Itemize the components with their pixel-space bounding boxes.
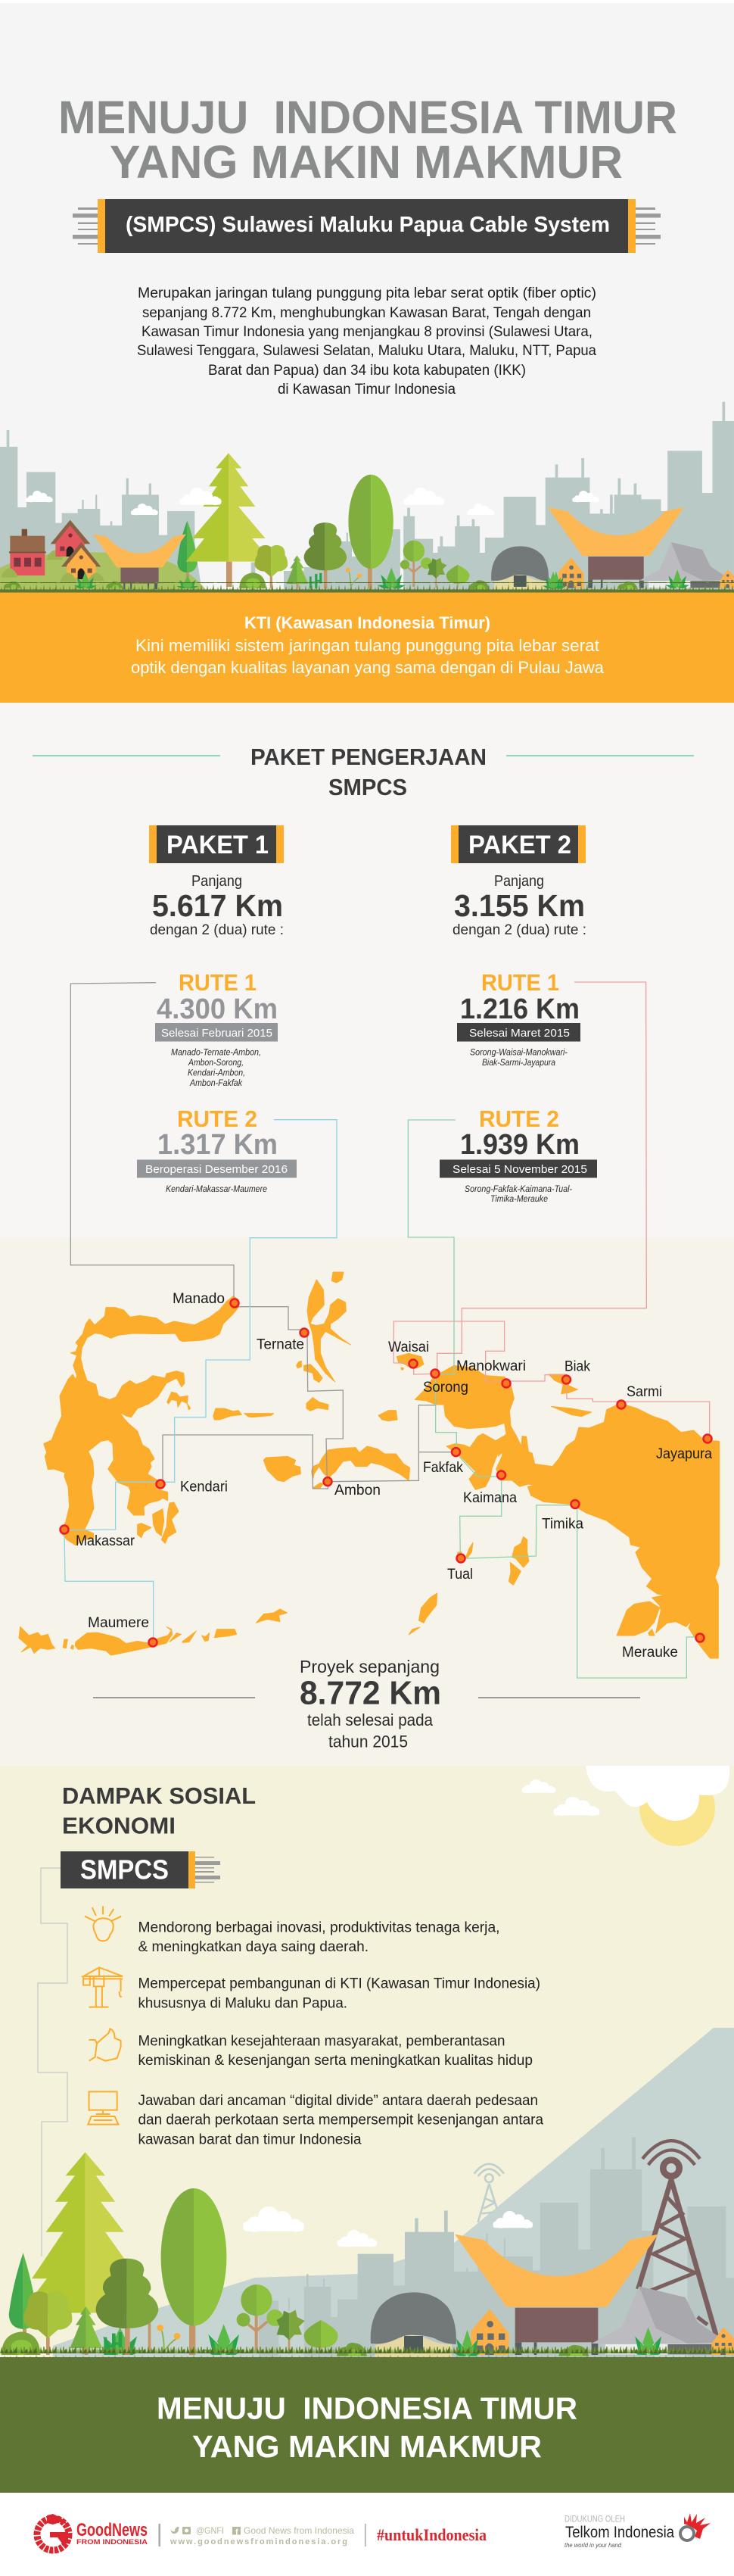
impact: digital divide (138, 2093, 543, 2148)
background map section (0, 1237, 734, 1766)
background dampak section (0, 1766, 734, 2357)
plant right (543, 572, 564, 588)
route block: paket 1 rute 2: 1.317 Km (157, 1129, 278, 1161)
grass strip (0, 582, 734, 593)
closing banner (0, 2357, 734, 2493)
illustration: city and village skyline (0, 402, 734, 593)
footer background (0, 2493, 734, 2576)
total project length: 8.772 Km (300, 1675, 441, 1711)
logo: Telkom Indonesia (564, 2513, 711, 2549)
middle buildings (259, 2254, 367, 2357)
heading: dampak sosial ekonomi (62, 1782, 256, 1839)
divider (159, 2524, 160, 2546)
islands: Biak and Yapen (549, 1374, 592, 1417)
city labels: Kaimana (463, 1490, 517, 1506)
cypress tree (177, 521, 197, 588)
route block: paket 2 rute 2: 1.939 Km (460, 1129, 580, 1161)
islands: Bacan and Obi (304, 1364, 328, 1411)
impact icons (83, 1906, 123, 2125)
yellow gabled house (61, 542, 101, 579)
sun and clouds (521, 1766, 729, 1846)
title: MENUJU INDONESIA TIMUR (58, 92, 677, 143)
logo: Telkom Indonesia: DIDUKUNG OLEH (564, 2515, 625, 2525)
route block: paket 1 rute 2: Kendari-Makassar-Maumere (166, 1184, 267, 1194)
city labels: Makassar (76, 1533, 135, 1549)
intro paragraph: di Kawasan Timur Indonesia (278, 382, 456, 398)
heading: paket pengerjaan: SMPCS (328, 774, 407, 800)
total project length: Proyek sepanjang (300, 1657, 440, 1676)
panel: paket 1 (149, 825, 284, 938)
left city buildings (0, 430, 367, 591)
dome, toraja house and pavilion (491, 507, 734, 590)
social media links: @GNFI (196, 2525, 224, 2536)
background paket section (0, 703, 734, 1237)
route block: paket 2 rute 2: Timika-Merauke (490, 1193, 548, 1204)
route block: paket 1 rute 1: Selesai Februari 2015 (161, 1027, 272, 1040)
cloud in front of pine (180, 488, 221, 505)
impact: digital divide: Jawaban dari ancaman “digital divide” antara daerah pedesaan (138, 2093, 538, 2109)
city labels: Biak (564, 1358, 590, 1375)
island: Waigeo (397, 1353, 424, 1370)
city labels: Maumere (88, 1615, 149, 1631)
route block: paket 1 rute 1: Kendari-Ambon, (188, 1068, 245, 1078)
peninsula: Bomberai (446, 1433, 509, 1489)
route block: paket 2 rute 2: RUTE 2 (479, 1106, 559, 1132)
left toraja roof house (93, 534, 186, 589)
island: Sulawesi (44, 1296, 238, 1545)
right buildings (367, 2138, 734, 2357)
center trees and plants (239, 475, 490, 589)
logo: Telkom Indonesia: Telkom Indonesia (565, 2524, 674, 2541)
panel: paket 1: dengan 2 (dua) rute : (150, 922, 284, 938)
logo: GoodNews from Indonesia (37, 2514, 148, 2550)
small tower (474, 2164, 504, 2222)
social media links (170, 2525, 354, 2546)
city labels: Manado (173, 1291, 225, 1307)
big tower (638, 2141, 717, 2336)
panel: paket 2: Panjang (494, 873, 544, 890)
route block: paket 2 rute 1: 1.216 Km (460, 993, 580, 1025)
clouds (26, 488, 599, 515)
city labels: Tual (447, 1567, 473, 1583)
heading: dampak sosial ekonomi: DAMPAK SOSIAL (62, 1782, 256, 1809)
page background top (0, 3, 734, 593)
islands: Kai and Aru (456, 1536, 529, 1585)
logo: Telkom Indonesia: the world in your hand (564, 2542, 622, 2549)
bushes near yellow house (60, 572, 104, 582)
island: Seram and Ambon (312, 1446, 410, 1489)
panel: KTI orange band: Kini memiliki sistem jaringan tulang punggung pita lebar serat (135, 636, 599, 655)
route block: paket 1 rute 1 (155, 969, 278, 1088)
red house (9, 529, 46, 575)
social media links: Good News from Indonesia (244, 2525, 354, 2536)
city labels: Waisai (388, 1339, 429, 1355)
mountain (53, 2028, 734, 2357)
islands: Tanimbar (409, 1593, 437, 1635)
route block: paket 2 rute 1: Biak-Sarmi-Jayapura (482, 1057, 555, 1068)
divider (365, 2524, 366, 2546)
heading: dampak sosial ekonomi: EKONOMI (62, 1813, 176, 1839)
logo: GoodNews from Indonesia: FROM INDONESIA (76, 2538, 148, 2546)
dome, toraja house and pavilion (371, 2235, 734, 2357)
panel: paket 2: 3.155 Km (454, 888, 585, 923)
total project length: tahun 2015 (328, 1732, 408, 1751)
route block: paket 1 rute 1: RUTE 1 (179, 969, 257, 996)
panel: paket 2 (451, 825, 586, 938)
islands: Sula (213, 1408, 274, 1420)
eastern islands (378, 1353, 720, 1658)
icon: light bulb (85, 1906, 121, 1941)
city pins (61, 1299, 711, 1646)
route block: paket 1 rute 1: 4.300 Km (157, 993, 278, 1025)
clouds (243, 2206, 533, 2247)
intro paragraph: Kawasan Timur Indonesia yang menjangkau 8 provinsi (Sulawesi Utara, (142, 324, 592, 340)
intro paragraph: Merupakan jaringan tulang punggung pita lebar serat optik (fiber optic) (138, 285, 596, 301)
illustration: bottom landscape (0, 2028, 734, 2357)
route block: paket 2 rute 1: Sorong-Waisai-Manokwari- (470, 1046, 568, 1057)
cable routes east (393, 982, 710, 1678)
route block: paket 1 rute 1: Ambon-Fakfak (189, 1077, 243, 1088)
social media links: www.goodnewsfromindonesia.org (170, 2537, 347, 2546)
route block: paket 1 rute 1: Manado-Ternate-Ambon, (171, 1046, 261, 1057)
route block: paket 2 rute 2: Selesai 5 November 2015 (453, 1163, 587, 1176)
impact: pembangunan (138, 1976, 540, 2012)
cypress tree (9, 2253, 37, 2336)
cable routes west (64, 983, 456, 1642)
city labels: Timika (542, 1517, 583, 1533)
SMPCS cable label (61, 1851, 220, 1888)
western islands (19, 1272, 410, 1655)
social media links: f (235, 2528, 238, 2537)
impact: digital divide: kawasan barat dan timur Indonesia (138, 2132, 362, 2148)
gray route paket 1 rute 1 (70, 983, 456, 1489)
island: Kolepom (617, 1601, 660, 1636)
city labels: Manokwari (456, 1358, 526, 1374)
total project length (93, 1657, 640, 1751)
icon: thumbs up (89, 2029, 121, 2061)
impact text blocks (138, 1920, 543, 2148)
map of eastern Indonesia (19, 982, 720, 1678)
impact: kesejahteraan (138, 2034, 533, 2069)
connector line (38, 1868, 67, 2256)
grass strip (0, 2347, 734, 2357)
village on the left (0, 453, 272, 589)
intro paragraph: Sulawesi Tenggara, Sulawesi Selatan, Maluku Utara, Maluku, NTT, Papua (137, 343, 596, 359)
red gabled house (51, 520, 90, 557)
impact: inovasi: Mendorong berbagai inovasi, produktivitas tenaga kerja, (138, 1920, 499, 1936)
impact: kesejahteraan: Meningkatkan kesejahteraan masyarakat, pemberantasan (138, 2034, 505, 2050)
center and right city buildings (367, 402, 734, 591)
title (58, 92, 677, 188)
panel: paket 1: Panjang (191, 873, 242, 890)
title: YANG MAKIN MAKMUR (110, 136, 623, 188)
intro paragraph (137, 285, 596, 398)
cable banner: (SMPCS) Sulawesi Maluku Papua Cable System (126, 213, 610, 237)
route block: paket 1 rute 2: Beroperasi Desember 2016 (145, 1163, 288, 1176)
hashtag: #untukIndonesia (377, 2525, 487, 2544)
route block: paket 2 rute 1: RUTE 1 (481, 969, 559, 996)
route block: paket 1 rute 2: RUTE 2 (177, 1106, 257, 1132)
panel: paket 1: PAKET 1 (166, 831, 269, 859)
impact: inovasi (138, 1920, 499, 1955)
city labels: Sarmi (627, 1384, 662, 1400)
panel: KTI orange band (0, 592, 734, 703)
panel: KTI orange band: optik dengan kualitas layanan yang sama dengan di Pulau Jawa (131, 658, 605, 677)
island: Halmahera (297, 1272, 350, 1382)
hill (0, 552, 206, 589)
islands: Nusa Tenggara (19, 1609, 287, 1655)
impact: digital divide: dan daerah perkotaan serta mempersempit kesenjangan antara (138, 2113, 543, 2128)
bush behind houses (2, 550, 63, 578)
SMPCS cable label: SMPCS (80, 1854, 169, 1885)
city labels: Fakfak (423, 1460, 463, 1476)
plants by houses (4, 572, 198, 588)
heading: paket pengerjaan (33, 744, 694, 800)
impact: pembangunan: khususnya di Maluku dan Papua. (138, 1996, 347, 2012)
closing banner: YANG MAKIN MAKMUR (192, 2429, 542, 2464)
icon: crane (83, 1967, 123, 2007)
red route paket 2 rute 1 (393, 982, 710, 1439)
route block: paket 2 rute 2 (440, 1106, 597, 1204)
impact: inovasi: & meningkatkan daya saing daerah. (138, 1939, 369, 1955)
plant behind cactus (98, 2322, 151, 2355)
city labels: Ternate (257, 1337, 304, 1353)
large pine tree (186, 453, 272, 587)
route block: paket 1 rute 2 (137, 1106, 297, 1194)
island: Papua (415, 1365, 720, 1658)
city labels: Jayapura (656, 1446, 712, 1462)
panel: paket 1: 5.617 Km (152, 888, 283, 923)
route block: paket 1 rute 1: Ambon-Sorong, (188, 1057, 244, 1068)
panel: paket 2: dengan 2 (dua) rute : (453, 922, 586, 938)
green route paket 2 rute 2 (408, 1120, 699, 1678)
city labels: Kendari (180, 1480, 228, 1495)
pine tree (21, 2152, 150, 2354)
total project length: telah selesai pada (307, 1711, 434, 1729)
light blue route paket 1 rute 2 (64, 1120, 337, 1642)
city labels: Merauke (622, 1645, 678, 1661)
impact: pembangunan: Mempercepat pembangunan di KTI (Kawasan Timur Indonesia) (138, 1976, 540, 1992)
trees, flowers and plants (2, 2188, 367, 2356)
city labels: Ambon (334, 1483, 381, 1499)
city labels: Sorong (423, 1380, 468, 1396)
intro paragraph: sepanjang 8.772 Km, menghubungkan Kawasan Barat, Tengah dengan (142, 305, 591, 321)
route block: paket 2 rute 1 (457, 969, 580, 1068)
icon: computer (88, 2091, 119, 2125)
panel: paket 2: PAKET 2 (468, 831, 571, 859)
island: Misool (378, 1411, 397, 1421)
island: Buru (263, 1456, 300, 1482)
closing banner: MENUJU INDONESIA TIMUR (157, 2391, 577, 2426)
route block: paket 2 rute 1: Selesai Maret 2015 (469, 1027, 570, 1040)
city labels (76, 1291, 712, 1661)
heading: paket pengerjaan: PAKET PENGERJAAN (250, 744, 487, 770)
intro paragraph: Barat dan Papua) dan 34 ibu kota kabupaten (IKK) (208, 363, 526, 379)
route block: paket 2 rute 2: Sorong-Fakfak-Kaimana-Tual- (465, 1184, 572, 1194)
cable banner (73, 199, 661, 253)
panel: KTI orange band: KTI (Kawasan Indonesia Timur) (244, 613, 490, 632)
logo: GoodNews from Indonesia: GoodNews (76, 2520, 148, 2540)
impact: kesejahteraan: kemiskinan & kesenjangan serta meningkatkan kualitas hidup (138, 2053, 533, 2069)
islands: southeast Sulawesi (138, 1392, 191, 1543)
